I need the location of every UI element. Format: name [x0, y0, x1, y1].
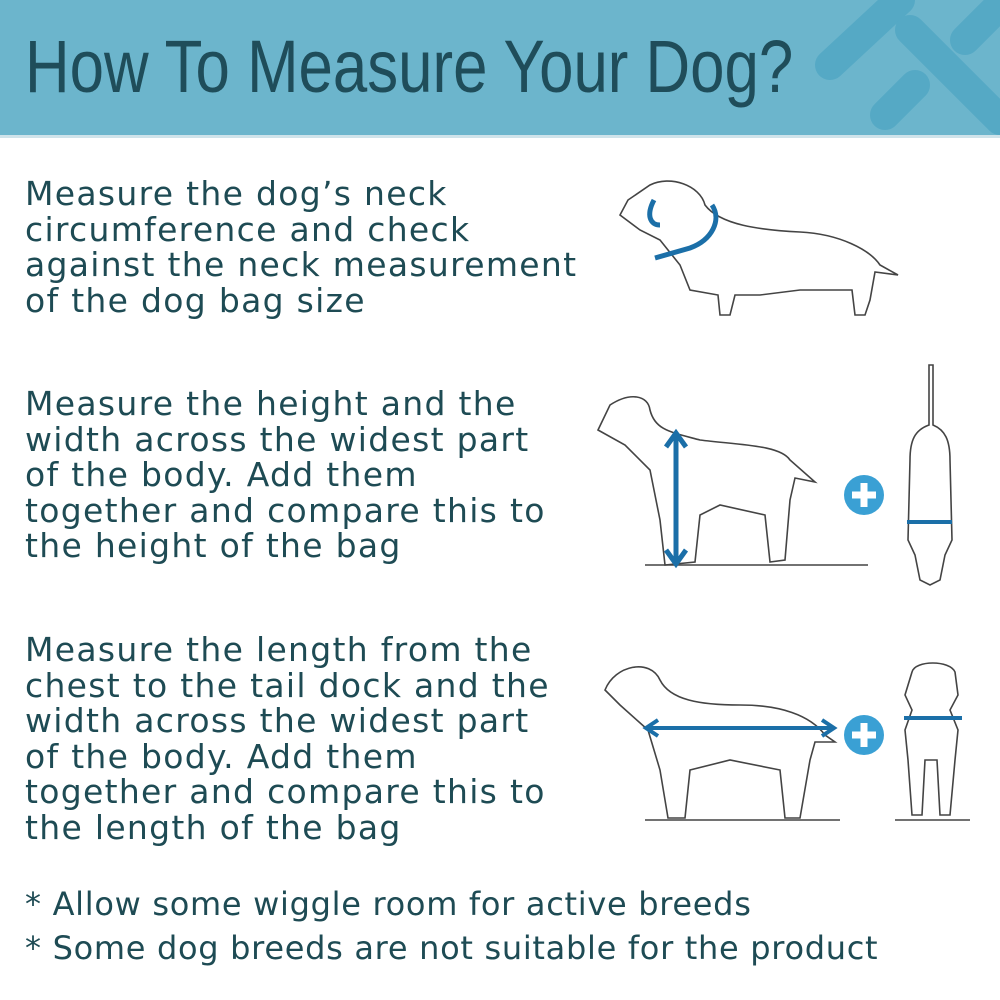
header decoration	[815, 0, 1000, 135]
text block: length: of the body. Add them	[25, 736, 418, 776]
dog top view	[907, 365, 952, 585]
text block: height: the height of the bag	[25, 526, 402, 565]
text block: height: of the body. Add them	[25, 455, 418, 494]
text block: neck: against the neck measurement	[25, 245, 577, 284]
text block: neck: circumference and check	[25, 210, 470, 248]
dog 1 with neck arrow	[620, 181, 898, 315]
text block: length: width across the widest part	[25, 701, 529, 740]
plus icon 2	[844, 715, 884, 755]
text block: length: chest to the tail dock and the	[25, 666, 550, 704]
dog 2 side with height arrow	[598, 397, 868, 565]
text block: height	[25, 384, 546, 565]
plus icon 1	[844, 475, 884, 515]
header band	[0, 0, 1000, 138]
footnotes: * Some dog breeds are not suitable for the product	[25, 929, 878, 967]
text block: length: together and compare this to	[25, 772, 546, 811]
text block: neck	[25, 174, 577, 320]
footnotes	[25, 885, 878, 967]
text block: length: the length of the bag	[25, 808, 402, 846]
text block: neck: Measure the dog’s neck	[25, 174, 448, 213]
text block: height: Measure the height and the	[25, 384, 517, 423]
footnotes: * Allow some wiggle room for active breeds	[25, 885, 752, 923]
text block: length: Measure the length from the	[25, 630, 533, 669]
dog front view	[895, 663, 970, 820]
text block: length	[25, 630, 550, 846]
text block: neck: of the dog bag size	[25, 280, 366, 320]
dog 3 with length arrow	[605, 667, 840, 820]
title: How To Measure Your Dog?	[25, 25, 793, 108]
text block: height: together and compare this to	[25, 490, 546, 530]
text block: height: width across the widest part	[25, 420, 529, 458]
